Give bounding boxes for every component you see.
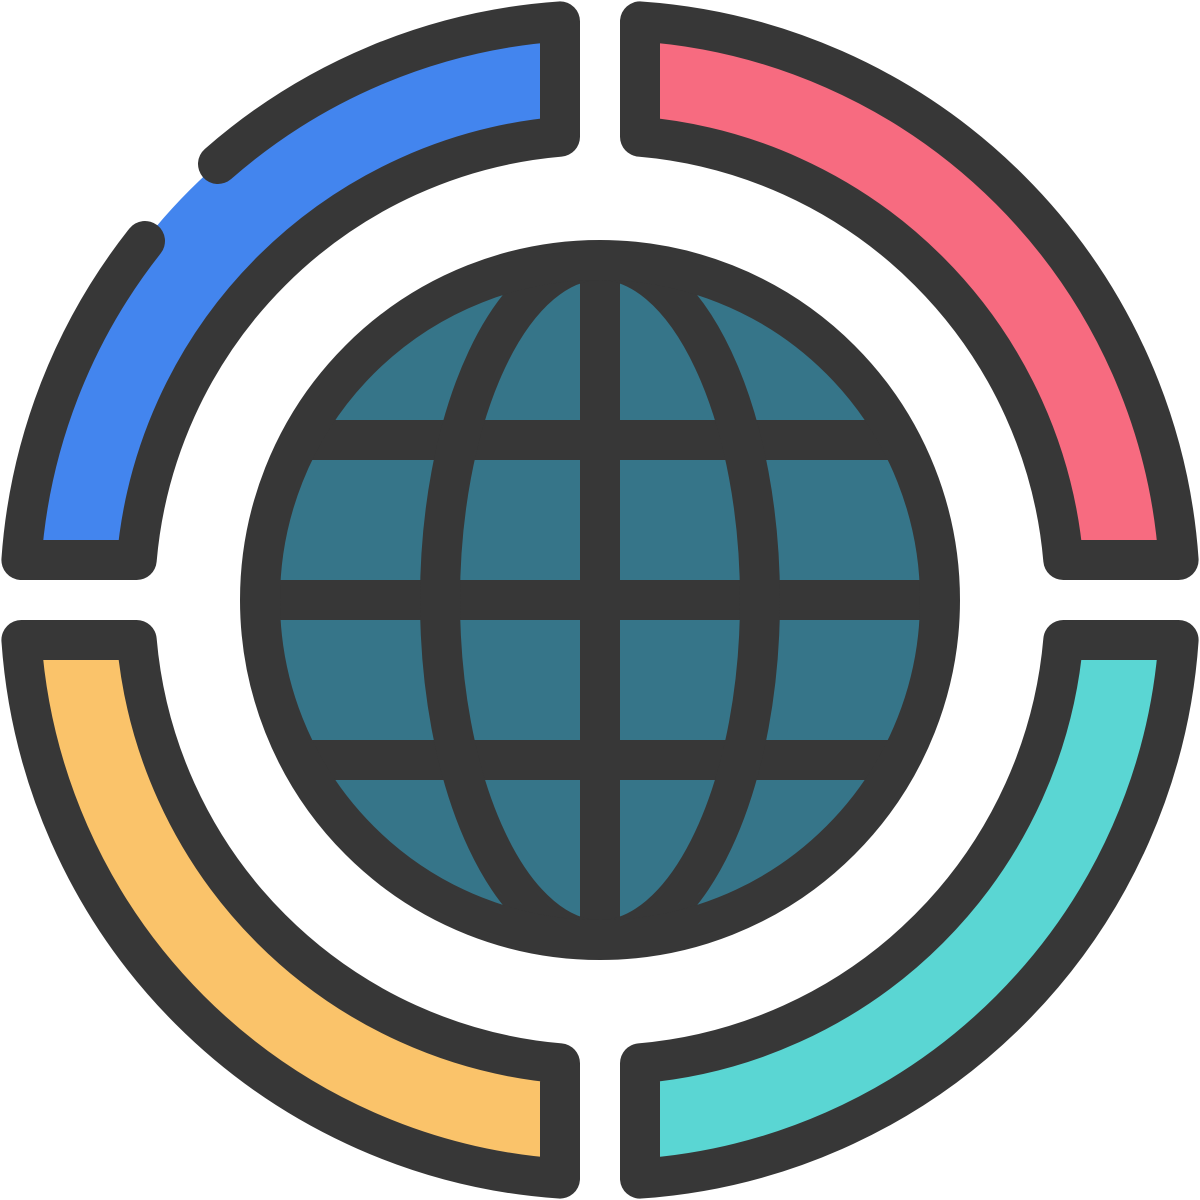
ring segment: yellow bottom-left [21,640,560,1179]
ring segment: pink top-right [640,21,1179,560]
ring segment: teal bottom-right [640,640,1179,1179]
ring segment: blue top-left [21,21,560,560]
globe [240,240,960,960]
